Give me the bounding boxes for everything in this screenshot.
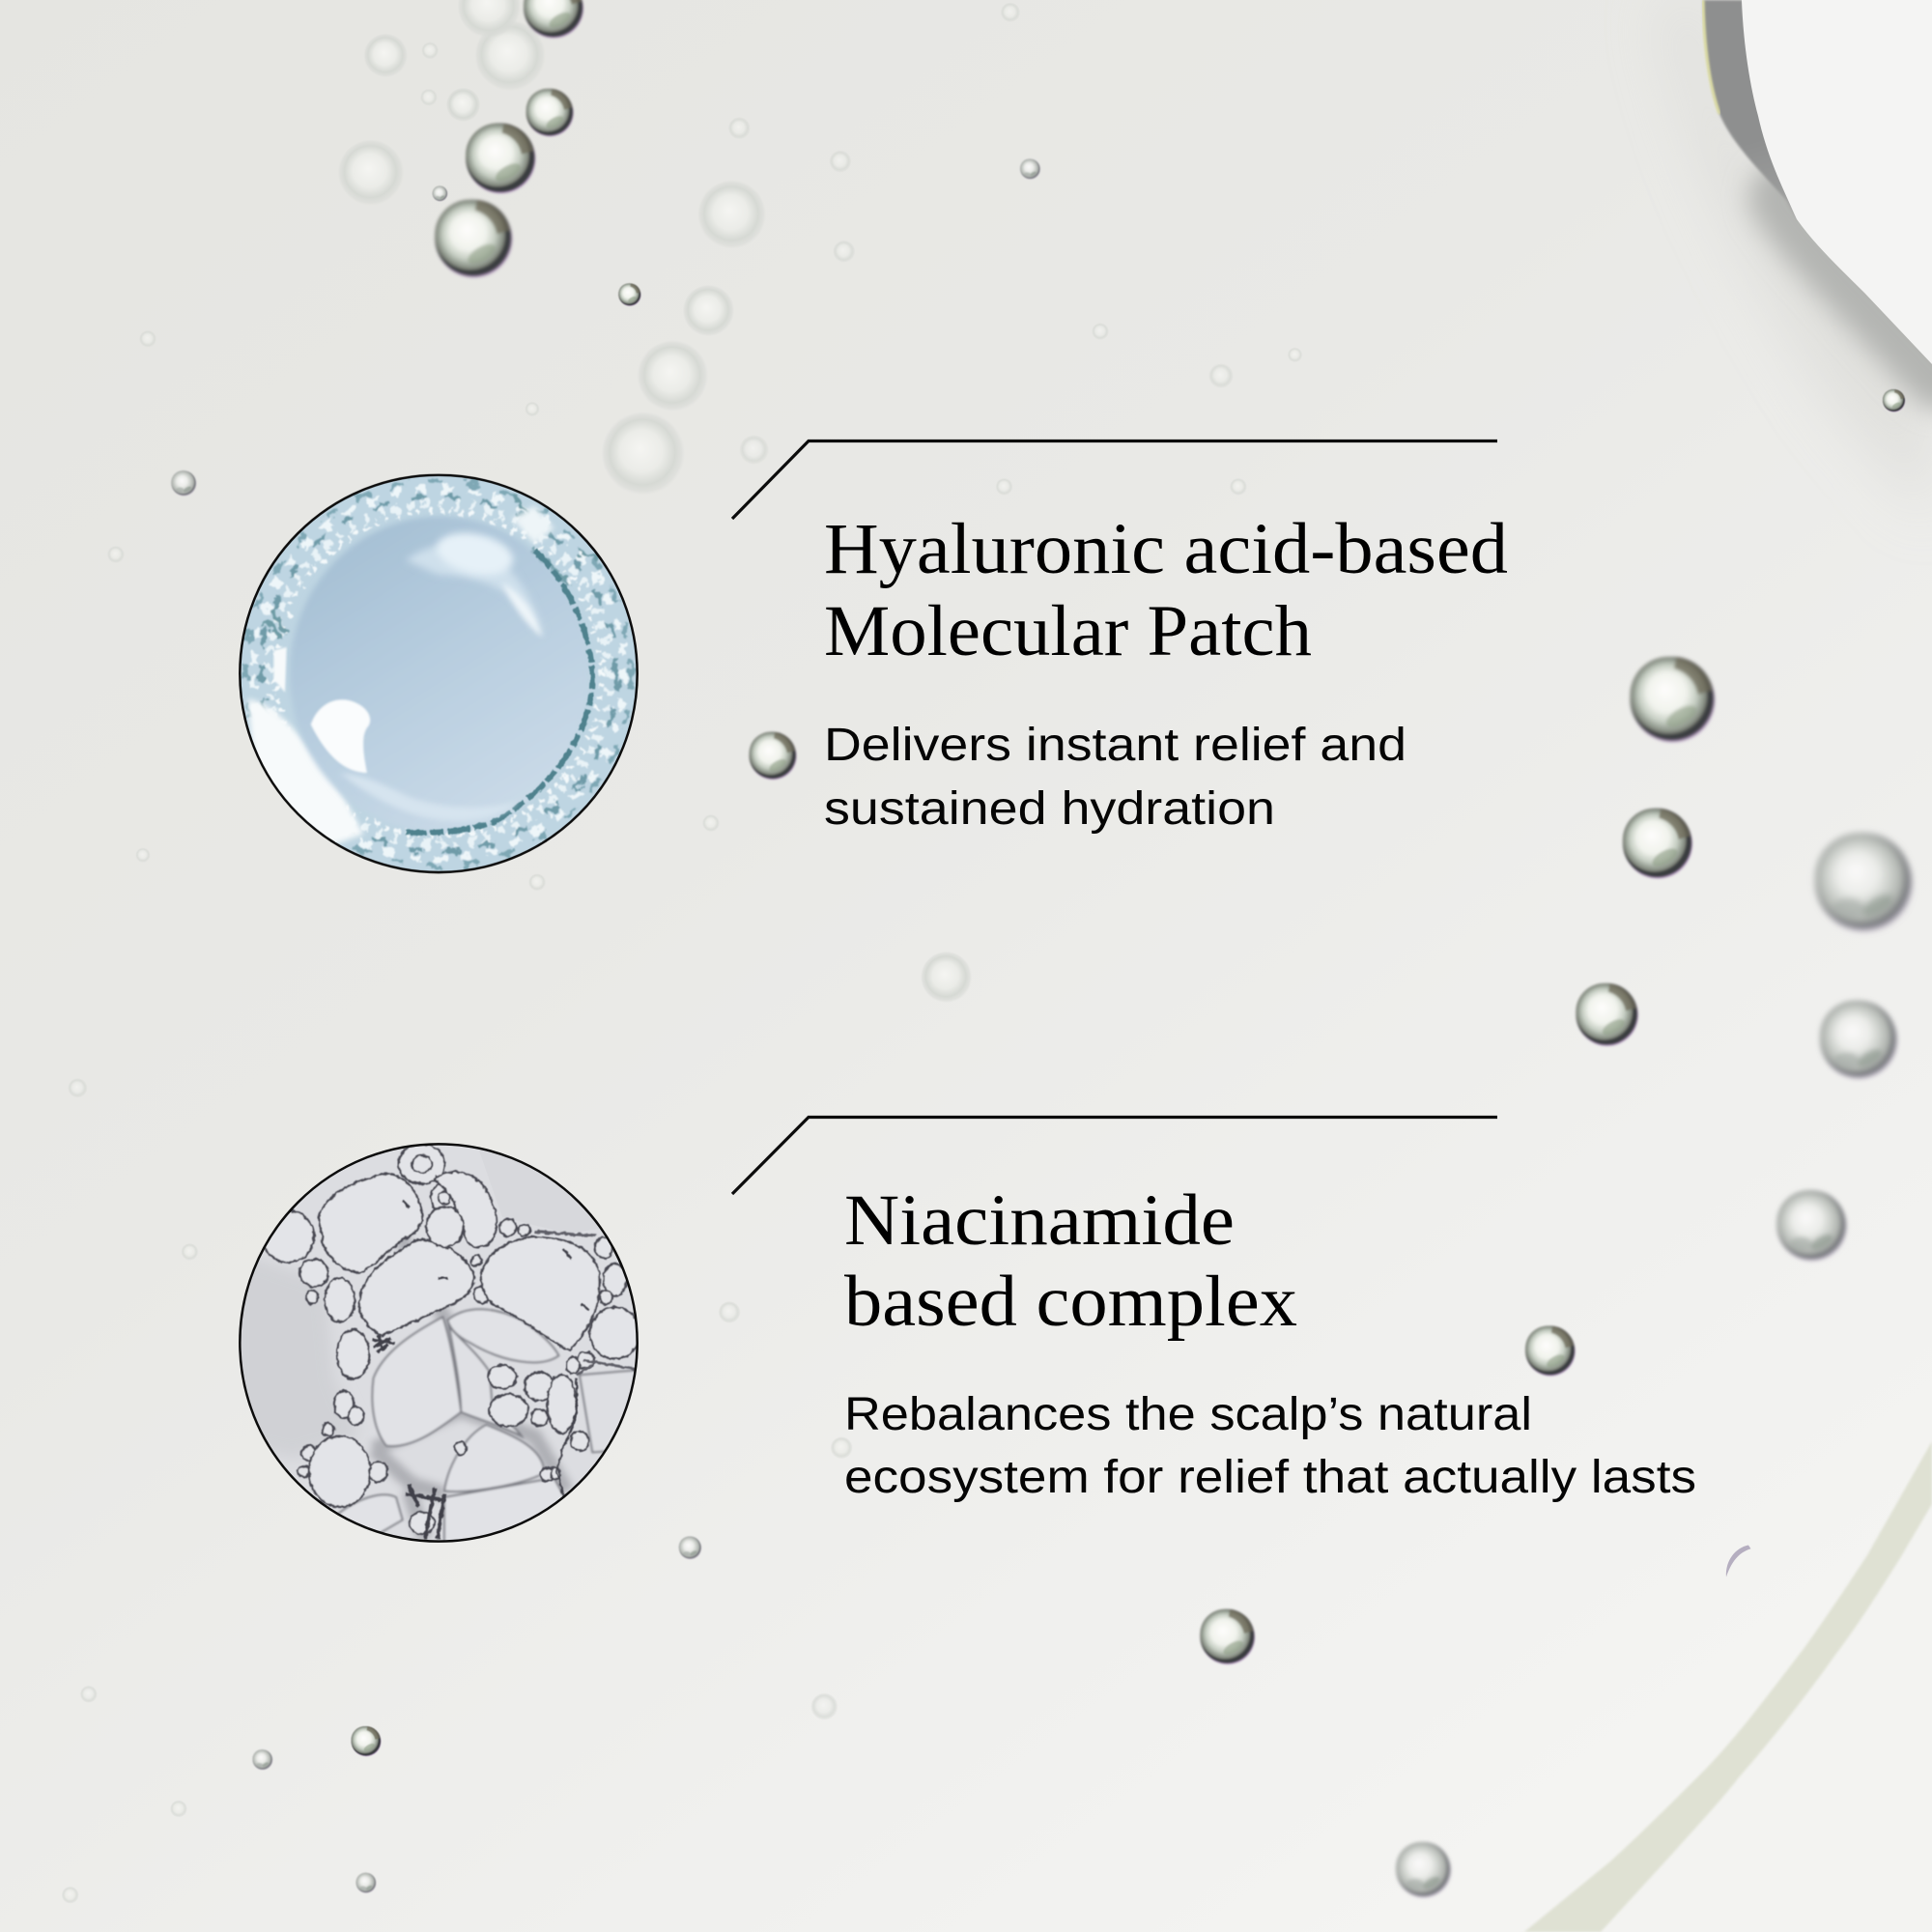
description: first feature: sustained hydration xyxy=(824,783,1275,835)
serum edge: bottom right xyxy=(1521,1441,1932,1932)
foam blurred cells xyxy=(335,1309,638,1546)
droplet highlight: arc xyxy=(408,545,537,615)
droplet lower reflection xyxy=(340,773,519,821)
heading: second feature: Niacinamide xyxy=(844,1180,1235,1261)
droplet highlight: top xyxy=(435,529,516,577)
heading: first feature: Hyaluronic acid-based xyxy=(824,509,1508,589)
foam junction clusters xyxy=(372,1201,638,1539)
connector line: second feature xyxy=(732,1117,1497,1194)
white glare lower left xyxy=(248,698,364,853)
image: foam bubbles xyxy=(232,1137,647,1552)
droplet ring texture xyxy=(246,481,631,867)
image: hydrating gel droplet xyxy=(232,467,647,882)
heading: second feature: based complex xyxy=(844,1262,1297,1342)
foam cells xyxy=(263,1144,640,1534)
description: second feature: Rebalances the scalp’s natural xyxy=(844,1389,1532,1440)
droplet dark rim xyxy=(406,551,592,833)
foam shadows xyxy=(374,1185,567,1539)
serum edge: top right xyxy=(1662,0,1932,522)
description: first feature: Delivers instant relief and xyxy=(824,720,1406,771)
description: second feature: ecosystem for relief that actually lasts xyxy=(844,1452,1696,1503)
heading: first feature: Molecular Patch xyxy=(824,591,1312,671)
connector line: first feature xyxy=(732,440,1497,519)
droplet highlight: white glare xyxy=(311,699,370,773)
droplet body xyxy=(290,517,589,833)
